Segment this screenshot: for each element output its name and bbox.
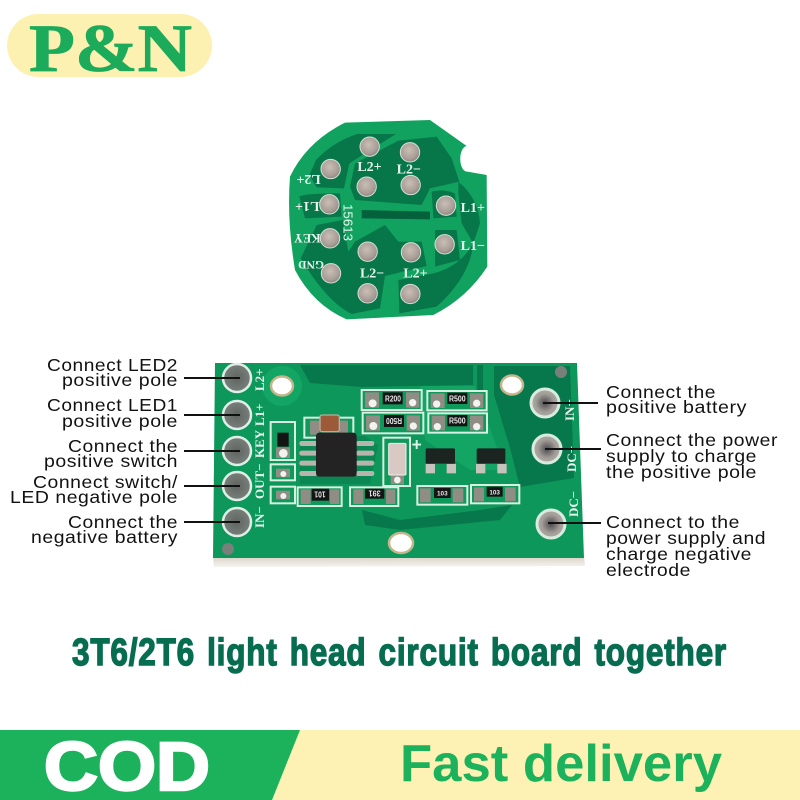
footer banner	[0, 728, 800, 800]
chip resistors: 101	[314, 489, 326, 498]
callout: LED1 positive	[47, 395, 240, 431]
dark centre bar on round board	[362, 210, 430, 219]
silkscreen labels on left edge: L1+	[252, 403, 267, 426]
callout: positive switch: positive switch	[44, 451, 178, 471]
silkscreen labels on round board: L2+	[357, 160, 382, 175]
callout: charge positive pole	[545, 430, 778, 482]
silkscreen labels on left edge: L2+	[252, 368, 267, 391]
IC body	[316, 433, 357, 477]
chip resistors: R500	[449, 417, 466, 426]
silkscreen labels on round board: L1+	[295, 198, 319, 213]
silkscreen labels on right edge: IN+	[562, 399, 577, 421]
solder highlights	[279, 399, 480, 499]
silkscreen labels on round board	[294, 160, 485, 282]
chip resistors: 391	[368, 489, 381, 498]
silkscreen labels on round board: L2−	[397, 162, 421, 177]
silkscreen labels on round board: L2+	[403, 266, 428, 281]
callouts: left labels	[10, 355, 240, 547]
silkscreen labels on round board: L2−	[360, 267, 384, 282]
silkscreen labels on left edge	[252, 368, 267, 528]
callout: negative battery	[31, 512, 240, 547]
bright traces on rectangular board	[262, 366, 505, 470]
callouts: right labels	[543, 382, 778, 580]
silkscreen labels on right edge	[562, 399, 581, 517]
chip resistors: 103	[437, 491, 448, 498]
silkscreen labels on round board: 15613	[340, 204, 355, 241]
panel: rectangular driver board	[213, 363, 585, 567]
callout: switch / LED negative	[10, 472, 240, 507]
callout: positive switch	[44, 436, 240, 471]
board body	[213, 363, 584, 558]
callout: charge positive pole: Connect the power	[606, 430, 778, 450]
callout: LED2 positive: positive pole	[62, 370, 178, 390]
copper pools on rectangular board	[300, 365, 574, 530]
callout: negative battery: negative battery	[31, 527, 178, 547]
board lower edge	[213, 556, 585, 567]
panel: round LED circuit board	[289, 120, 487, 319]
LED	[389, 443, 406, 475]
plus marker: +	[412, 435, 422, 455]
silkscreen labels on left edge: OUT−	[252, 463, 267, 499]
silver solder lands	[276, 392, 516, 504]
callout: positive switch: Connect the	[68, 436, 178, 456]
mounting holes	[271, 376, 523, 553]
SOT transistors	[426, 448, 507, 473]
right solder pads	[531, 389, 565, 538]
silkscreen labels on round board: KEY	[294, 231, 321, 245]
chip resistors: R500	[449, 394, 466, 403]
callout: positive battery: positive battery	[606, 397, 747, 417]
callout: LED2 positive: Connect LED2	[47, 355, 178, 375]
callout: charge negative electrode	[548, 512, 766, 580]
silkscreen labels on round board: GND	[298, 258, 324, 271]
chip resistors	[277, 392, 503, 501]
callout: LED2 positive	[47, 355, 240, 390]
callout: charge positive pole: supply to charge	[606, 446, 757, 466]
callout: charge negative electrode: charge negative	[606, 544, 752, 564]
callout: charge negative electrode: power supply and	[606, 528, 766, 548]
callout: switch / LED negative: Connect switch/	[33, 472, 178, 492]
components	[271, 390, 519, 506]
IC pins	[299, 441, 374, 476]
silkscreen labels on left edge: IN−	[252, 506, 267, 528]
left solder pads	[223, 364, 251, 536]
copper pools on round board	[299, 134, 480, 314]
silkscreen labels on round board: L1+	[461, 201, 485, 216]
callout: LED1 positive: positive pole	[62, 411, 178, 431]
silkscreen labels on right edge: DC+	[564, 446, 579, 472]
chip resistors: R200	[385, 394, 401, 403]
callout: switch / LED negative: LED negative pole	[10, 487, 178, 507]
callout: negative battery: Connect the	[68, 512, 178, 532]
logo: P&N: P&N	[29, 10, 192, 86]
callout: charge positive pole: the positive pole	[606, 462, 757, 482]
silkscreen labels on right edge: DC−	[566, 491, 581, 517]
silkscreen labels on round board: L2+	[296, 171, 321, 186]
chip resistors: 103	[489, 489, 500, 496]
silkscreen labels on round board: L1−	[461, 239, 485, 254]
solder pads on round board	[320, 137, 456, 304]
fast delivery label: Fast delivery	[400, 735, 722, 793]
chip resistors: R500	[386, 416, 402, 425]
callout: LED1 positive: Connect LED1	[47, 395, 178, 415]
silkscreen labels on left edge: KEY	[252, 429, 267, 458]
callout: charge negative electrode: electrode	[606, 560, 691, 580]
callout: charge negative electrode: Connect to the	[606, 512, 740, 532]
callout: positive battery	[543, 382, 747, 417]
ceramic capacitor	[320, 415, 339, 432]
white component footprints	[271, 390, 519, 506]
callout: positive battery: Connect the	[606, 382, 716, 402]
corner vias	[222, 366, 567, 555]
